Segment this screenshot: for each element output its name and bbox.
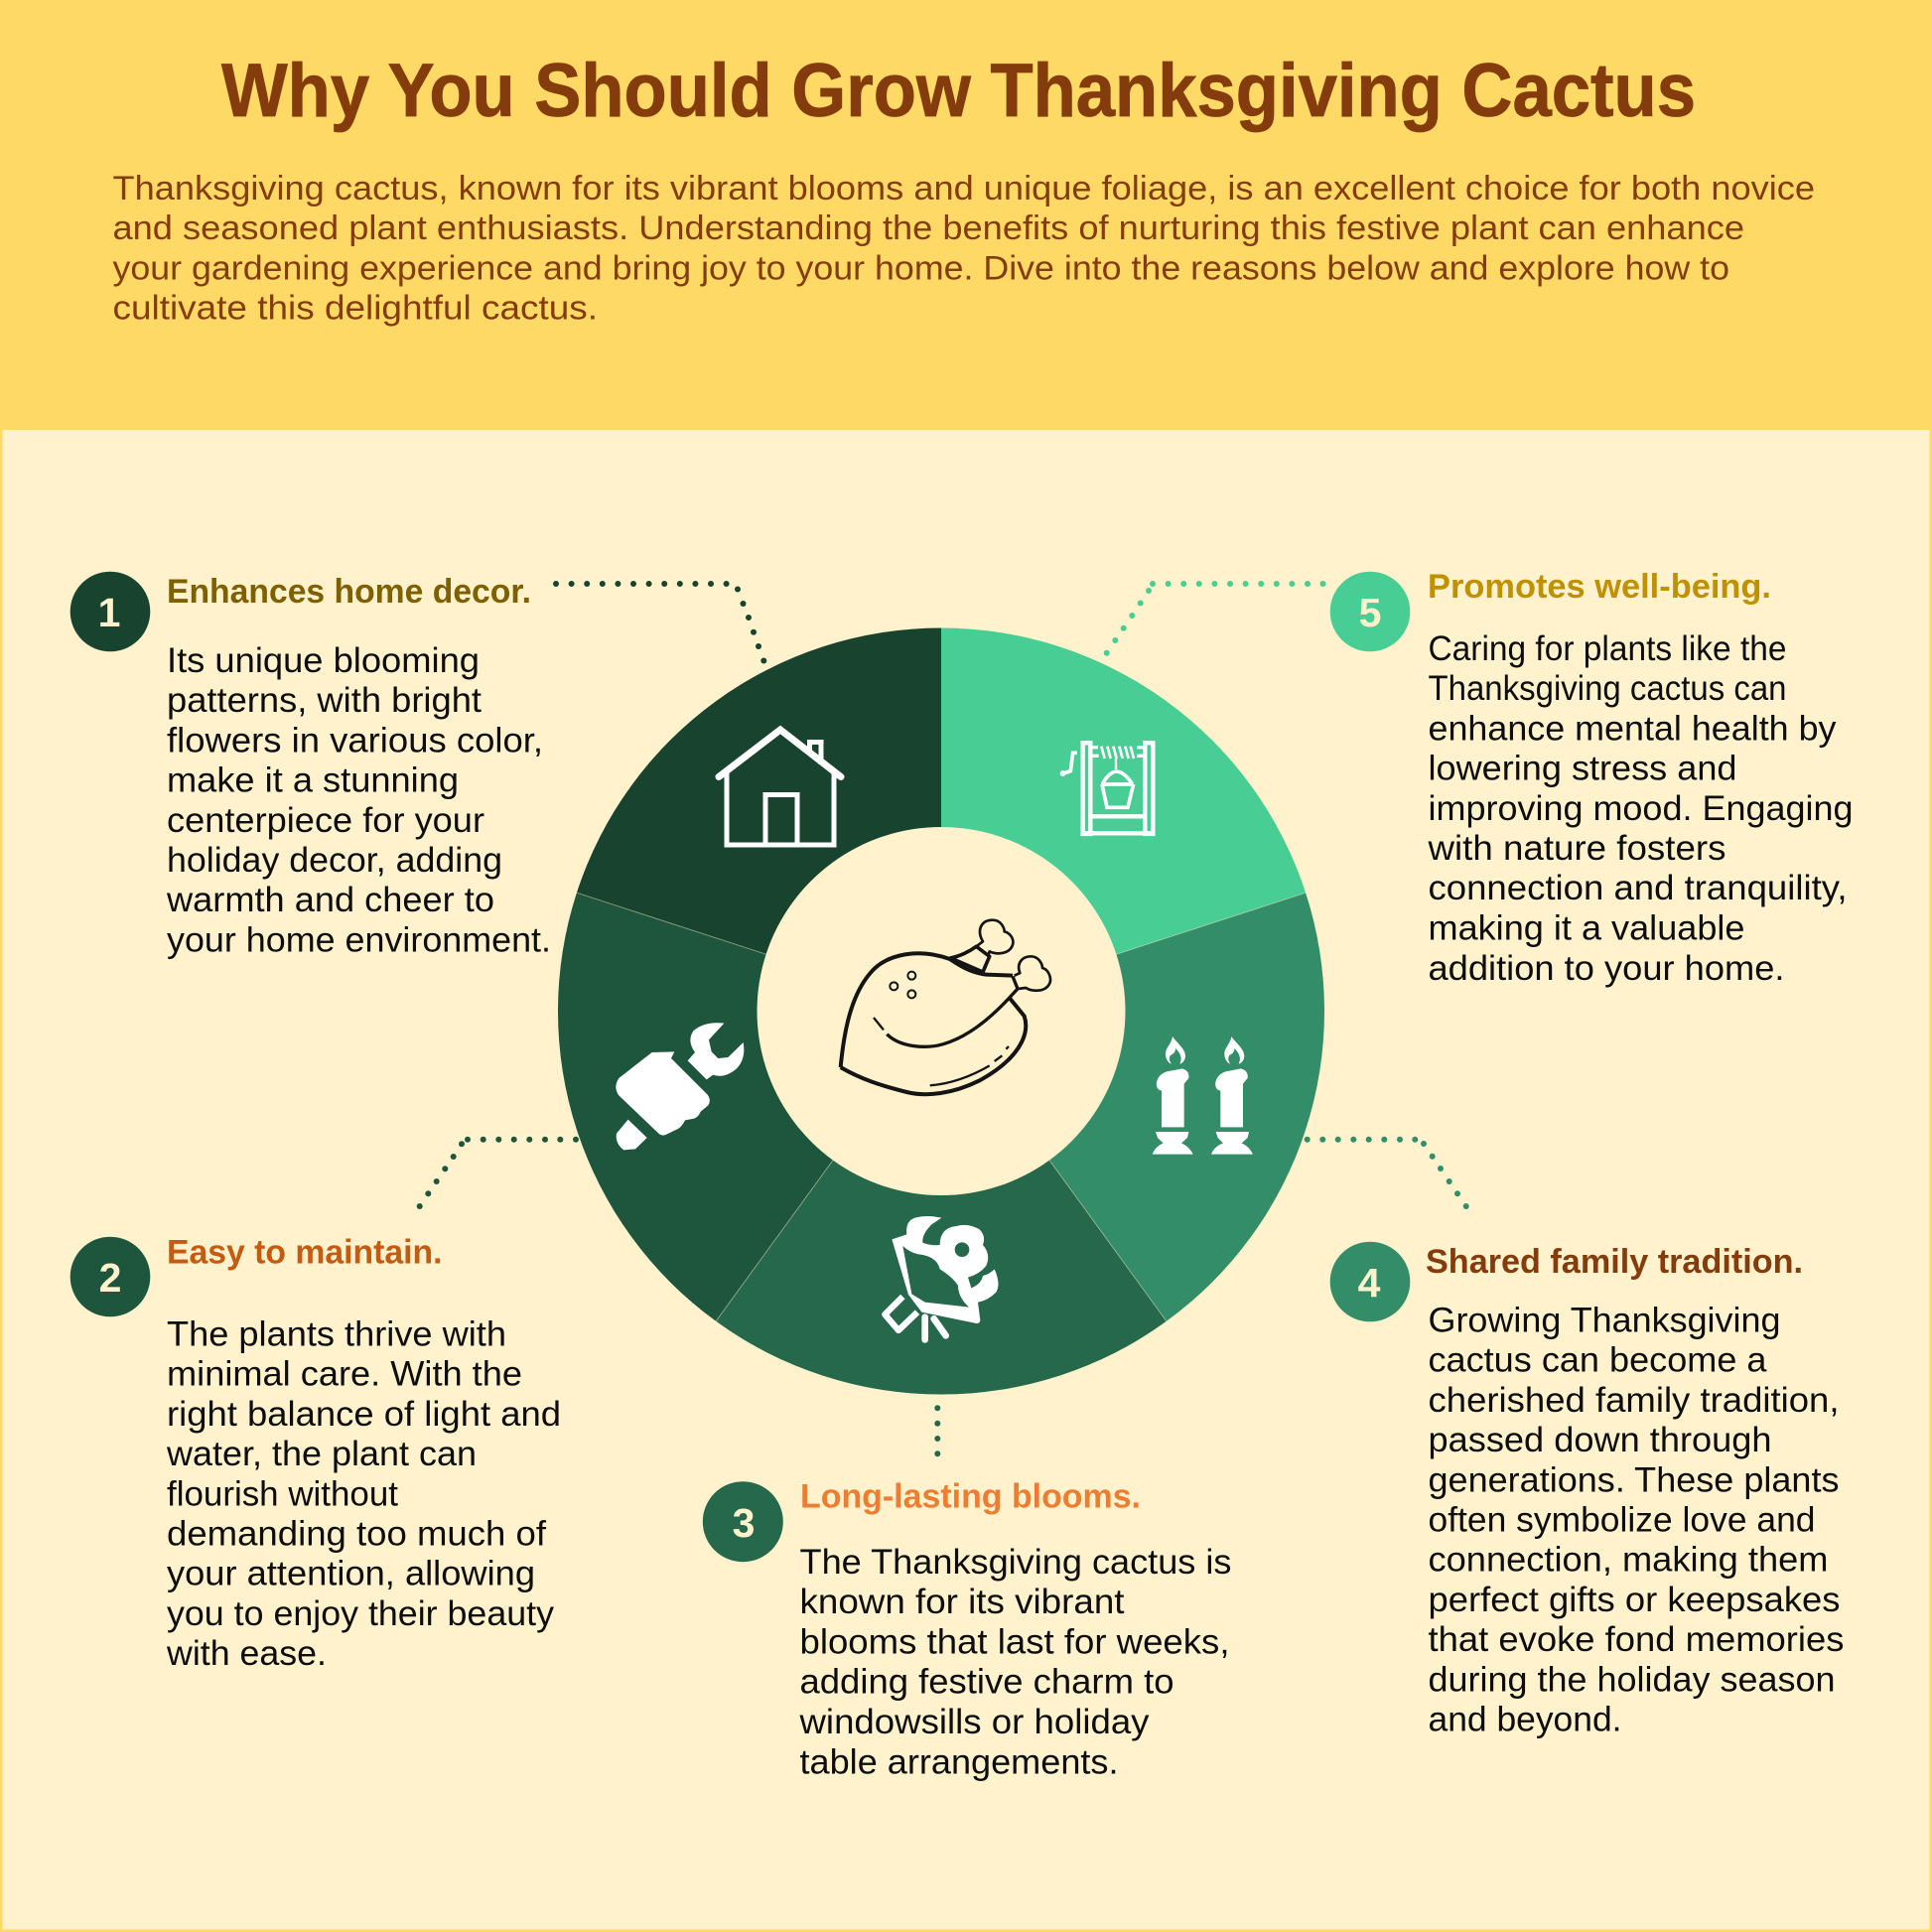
body text 4 bbox=[1428, 1301, 1845, 1739]
icon: house bbox=[719, 730, 841, 845]
body text 3: known for its vibrant bbox=[800, 1583, 1125, 1621]
body text 3: table arrangements. bbox=[800, 1742, 1118, 1781]
segment 4: family tradition bbox=[1049, 893, 1324, 1321]
number badge 2 bbox=[70, 1237, 150, 1316]
intro paragraph: Thanksgiving cactus, known for its vibrant blooms and unique foliage, is an excellent choice for both novice bbox=[113, 170, 1815, 207]
panel: item 3 long-lasting blooms bbox=[703, 1477, 1231, 1781]
body text 1: Its unique blooming bbox=[167, 641, 480, 680]
body text 5: addition to your home. bbox=[1428, 949, 1785, 988]
body text 4: passed down through bbox=[1428, 1421, 1771, 1459]
body text 4: cherished family tradition, bbox=[1428, 1381, 1839, 1420]
body text 5: Thanksgiving cactus can bbox=[1428, 669, 1787, 708]
intro paragraph: and seasoned plant enthusiasts. Understanding the benefits of nurturing this festive plant can enhance bbox=[113, 209, 1744, 247]
body text 4: often symbolize love and bbox=[1428, 1501, 1815, 1539]
header band bbox=[0, 0, 1932, 430]
connector: item 5 dotted line bbox=[1104, 581, 1326, 656]
body text 1: centerpiece for your bbox=[167, 801, 484, 840]
body text 2: right balance of light and bbox=[167, 1395, 561, 1434]
body text 3: adding festive charm to bbox=[800, 1663, 1173, 1702]
body text 1 bbox=[166, 641, 551, 959]
body text 2: minimal care. With the bbox=[167, 1355, 522, 1394]
number badge 2: 2 bbox=[99, 1255, 121, 1301]
body text 1: make it a stunning bbox=[167, 761, 459, 800]
body text 4: generations. These plants bbox=[1428, 1460, 1839, 1499]
connector: item 4 dotted line bbox=[1305, 1137, 1469, 1209]
heading 5: Promotes well-being. bbox=[1428, 568, 1771, 606]
number badge 4: 4 bbox=[1358, 1260, 1381, 1306]
body text 5: with nature fosters bbox=[1427, 829, 1725, 868]
body text 4: perfect gifts or keepsakes bbox=[1428, 1581, 1841, 1619]
body text 2: flourish without bbox=[167, 1474, 398, 1513]
body text 1: your home environment. bbox=[167, 920, 551, 959]
body text 2: with ease. bbox=[166, 1634, 327, 1673]
segment 1: home decor bbox=[577, 627, 941, 954]
number badge 5 bbox=[1330, 572, 1410, 651]
body text 2: demanding too much of bbox=[167, 1515, 546, 1553]
segment 2: easy to maintain bbox=[558, 893, 833, 1321]
intro paragraph: your gardening experience and bring joy to your home. Dive into the reasons below and explore how to bbox=[113, 250, 1729, 288]
body text 5: enhance mental health by bbox=[1428, 709, 1837, 748]
body text 5: lowering stress and bbox=[1428, 750, 1737, 788]
number badge 3: 3 bbox=[733, 1500, 755, 1546]
heading 1: Enhances home decor. bbox=[167, 573, 531, 611]
number badge 3 bbox=[703, 1481, 783, 1562]
icon: bouquet bbox=[885, 1216, 998, 1339]
body text 4: Growing Thanksgiving bbox=[1428, 1301, 1781, 1340]
body text 2: The plants thrive with bbox=[167, 1314, 506, 1354]
panel: item 5 promotes well-being bbox=[1330, 568, 1853, 988]
heading 3: Long-lasting blooms. bbox=[800, 1477, 1141, 1515]
title: Why You Should Grow Thanksgiving Cactus bbox=[221, 49, 1696, 133]
number badge 1: 1 bbox=[98, 590, 120, 635]
panel: main background bbox=[2, 430, 1930, 1930]
panel: item 4 shared family tradition bbox=[1330, 1242, 1845, 1739]
body text 3: The Thanksgiving cactus is bbox=[800, 1543, 1231, 1582]
body text 5: connection and tranquility, bbox=[1428, 869, 1847, 907]
body text 5: improving mood. Engaging bbox=[1428, 789, 1853, 828]
body text 1: holiday decor, adding bbox=[167, 841, 502, 880]
icon: well with bucket bbox=[1060, 743, 1153, 834]
heading 2: Easy to maintain. bbox=[167, 1233, 443, 1271]
body text 1: warmth and cheer to bbox=[166, 881, 494, 919]
panel: item 1 enhances home decor bbox=[70, 572, 551, 959]
number badge 4 bbox=[1330, 1242, 1410, 1321]
body text 2: water, the plant can bbox=[166, 1435, 477, 1473]
intro paragraph: cultivate this delightful cactus. bbox=[113, 290, 598, 328]
body text 3: blooms that last for weeks, bbox=[800, 1622, 1229, 1661]
donut chart bbox=[558, 627, 1324, 1395]
body text 2: your attention, allowing bbox=[167, 1555, 535, 1593]
icon: hand holding wrench bbox=[616, 1023, 744, 1150]
body text 1: flowers in various color, bbox=[167, 721, 543, 759]
segment 5: well-being bbox=[941, 627, 1306, 954]
heading 4: Shared family tradition. bbox=[1426, 1243, 1803, 1281]
body text 3 bbox=[798, 1543, 1231, 1781]
body text 5 bbox=[1427, 629, 1853, 988]
connector: item 1 dotted line bbox=[553, 581, 766, 663]
body text 2: you to enjoy their beauty bbox=[167, 1594, 554, 1633]
intro paragraph bbox=[113, 170, 1815, 328]
body text 4: cactus can become a bbox=[1428, 1341, 1767, 1380]
body text 4: and beyond. bbox=[1428, 1700, 1622, 1739]
body text 1: patterns, with bright bbox=[167, 681, 482, 720]
body text 3: windowsills or holiday bbox=[798, 1703, 1150, 1741]
body text 5: making it a valuable bbox=[1428, 908, 1745, 947]
number badge 5: 5 bbox=[1359, 590, 1381, 635]
icon: roast turkey bbox=[841, 920, 1050, 1094]
body text 4: that evoke fond memories bbox=[1428, 1620, 1845, 1659]
connector: item 3 dotted line bbox=[934, 1405, 940, 1456]
body text 2 bbox=[166, 1314, 561, 1673]
icon: two candles bbox=[1153, 1036, 1253, 1155]
body text 5: Caring for plants like the bbox=[1428, 629, 1787, 668]
panel: item 2 easy to maintain bbox=[70, 1233, 561, 1673]
connector: item 2 dotted line bbox=[417, 1137, 579, 1209]
number badge 1 bbox=[70, 572, 150, 651]
segment 3: long-lasting blooms bbox=[716, 1161, 1167, 1395]
body text 4: during the holiday season bbox=[1428, 1660, 1835, 1699]
body text 4: connection, making them bbox=[1428, 1541, 1829, 1580]
